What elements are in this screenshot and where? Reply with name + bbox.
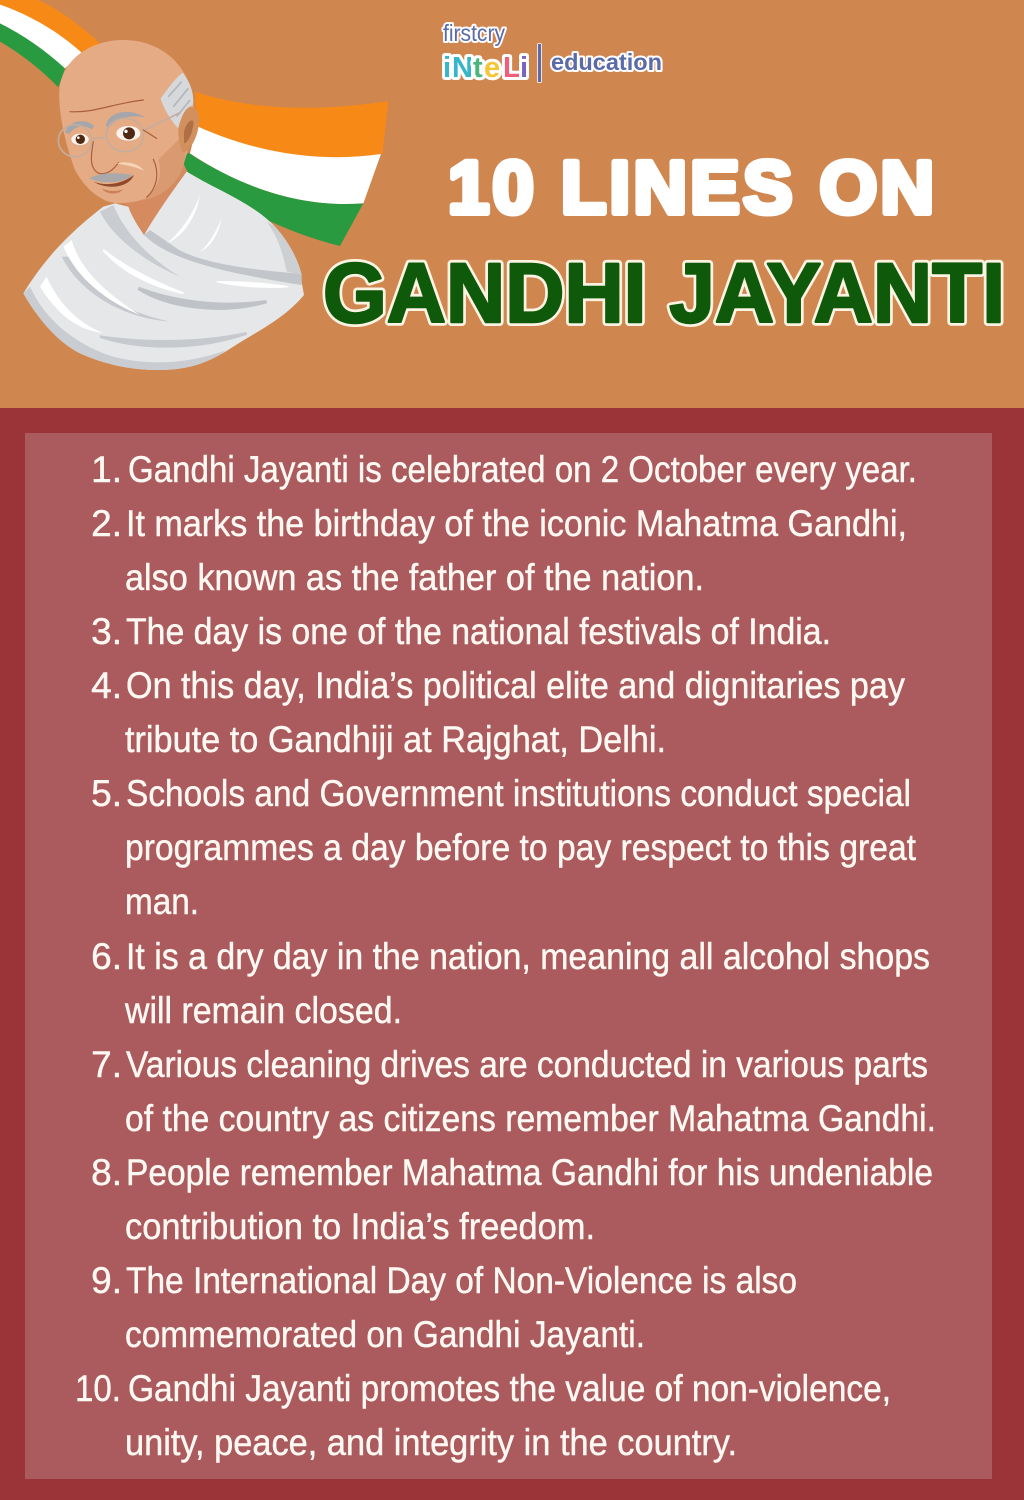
cheek highlight (117, 162, 144, 171)
logo: education: education (551, 49, 662, 75)
icon: moustache (89, 173, 132, 182)
logo: intelli: L (503, 52, 521, 84)
logo: intelli: e (484, 52, 500, 84)
logo: intelli: N (452, 52, 473, 84)
content panel (25, 433, 992, 1479)
line 1: Gandhi Jayanti is celebrated on 2 October every year. (128, 449, 917, 490)
icon: neck (113, 157, 188, 235)
line 4 (91, 665, 905, 760)
chin shadow (143, 133, 186, 200)
logo (443, 20, 662, 84)
line 2: It marks the birthday of the iconic Mahatma Gandhi, (126, 503, 907, 544)
logo: firstcry: firstcry (443, 20, 505, 46)
line 7: 7. (91, 1044, 122, 1085)
line 6: will remain closed. (124, 990, 402, 1031)
line 9: 9. (91, 1260, 122, 1301)
logo: intelli: i (443, 52, 451, 84)
line 10: Gandhi Jayanti promotes the value of non-violence, (128, 1368, 891, 1409)
icon: glasses (58, 113, 180, 157)
line 6: 6. (91, 936, 122, 977)
line 3: 3. (91, 611, 122, 652)
line 7: of the country as citizens remember Mahatma Gandhi. (125, 1098, 936, 1139)
line 3: The day is one of the national festivals of India. (126, 611, 831, 652)
line 5: programmes a day before to pay respect to this great (125, 827, 917, 868)
line 9: commemorated on Gandhi Jayanti. (125, 1314, 645, 1355)
icon: mouth (93, 175, 134, 193)
line 9: The International Day of Non-Violence is also (126, 1260, 797, 1301)
line 10 (75, 1368, 891, 1463)
line 7 (91, 1044, 936, 1139)
title line 1: 10 LINES ON (448, 146, 934, 229)
line 5: Schools and Government institutions conduct special (126, 773, 911, 814)
line 8: People remember Mahatma Gandhi for his undeniable (126, 1152, 933, 1193)
illustration: Gandhi with flag (0, 0, 388, 370)
line 5: 5. (91, 773, 122, 814)
line 8 (91, 1152, 933, 1247)
header background (0, 0, 1024, 408)
logo: divider (538, 44, 541, 82)
list of ten lines (75, 449, 936, 1463)
icon: ear (178, 107, 199, 153)
line 2: also known as the father of the nation. (125, 557, 704, 598)
icon: eyebrows (65, 112, 145, 134)
line 5 (91, 773, 917, 922)
line 4: 4. (91, 665, 122, 706)
logo: intelli: t (473, 52, 483, 84)
icon: Indian flag (0, 0, 388, 246)
line 4: tribute to Gandhiji at Rajghat, Delhi. (125, 719, 666, 760)
line 1: 1. (91, 449, 122, 490)
line 8: 8. (91, 1152, 122, 1193)
footer background (0, 408, 1024, 1500)
icon: hair (161, 73, 193, 128)
line 10: 10. (75, 1368, 121, 1409)
icon: shawl (23, 172, 304, 370)
line 7: Various cleaning drives are conducted in various parts (126, 1044, 928, 1085)
line 5: man. (125, 881, 199, 922)
line 4: On this day, India’s political elite and dignitaries pay (126, 665, 905, 706)
icon: eyes (71, 126, 140, 145)
logo: intelli: i (520, 52, 528, 84)
line 2 (91, 503, 907, 598)
line 9 (91, 1260, 797, 1355)
logo: intelli (443, 52, 528, 84)
icon: head (59, 40, 194, 203)
title line 2: GANDHI JAYANTI (323, 246, 1005, 340)
line 8: contribution to India’s freedom. (125, 1206, 595, 1247)
line 10: unity, peace, and integrity in the country. (125, 1422, 737, 1463)
line 6 (91, 936, 930, 1031)
title line 2: GANDHI JAYANTI (323, 246, 1005, 340)
line 6: It is a dry day in the nation, meaning all alcohol shops (126, 936, 930, 977)
icon: nose and wrinkles (70, 100, 157, 197)
line 2: 2. (91, 503, 122, 544)
